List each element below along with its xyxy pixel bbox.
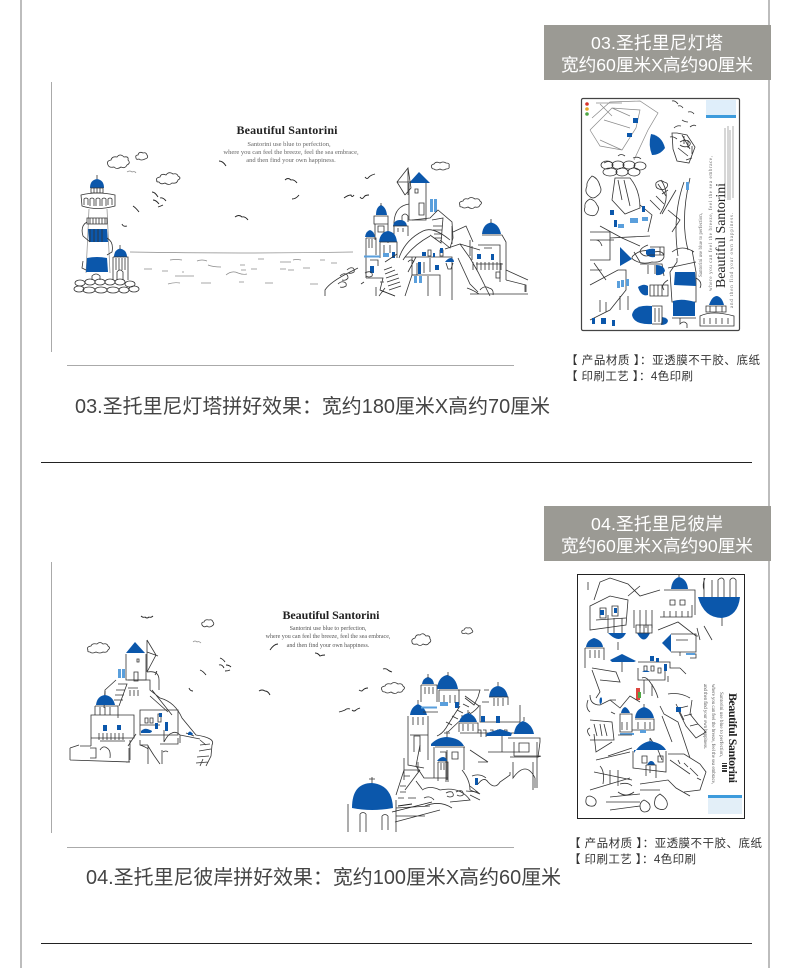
text: wall sticker slogan: Beautiful Santorini [236,123,338,137]
poster text: rotated title: Santorini use blue to perfection, [699,213,704,277]
text: wall sticker slogan: where you can feel the breeze, feel the sea embrace, [223,149,359,156]
heading: product 04 title box [544,506,771,561]
divider: panel 04 base line [67,846,514,848]
poster text: rotated title: Santorini use blue to perfection, [718,692,723,757]
text: wall sticker slogan: and then find your own happiness. [246,157,336,164]
heading: product 04 title box: 04.圣托里尼彼岸 [591,514,723,534]
illustration: sea lines [130,252,353,284]
poster text: rotated title: and then find your own happiness. [702,684,707,749]
text: wall sticker slogan: Santorini use blue to perfection, [247,141,331,148]
text: material specs 03: 【 产品材质 】：亚透膜不干胶、底纸 [566,353,760,367]
caption: 03 assembled size: 03.圣托里尼灯塔拼好效果：宽约180厘米X高约70厘米 [75,395,550,418]
heading: product 03 title box: 03.圣托里尼灯塔 [591,33,723,53]
text: wall sticker slogan: and then find your own happiness. [287,642,370,649]
text: material specs 03: 【 印刷工艺 】：4色印刷 [566,369,693,383]
illustration: clouds and birds [87,616,473,712]
text: wall sticker slogan [223,123,359,164]
illustration: right cliff village [348,672,541,832]
text: material specs 04: 【 印刷工艺 】：4色印刷 [569,852,696,866]
poster: lighthouse sticker sheet [582,98,740,330]
illustration: left cliff village [70,640,213,766]
text: material specs 03 [566,353,760,383]
poster text: rotated title: and then find your own happiness. [730,213,735,308]
text: material specs 04 [569,836,762,866]
illustration: cliff village with windmill [325,168,528,300]
poster text: rotated title: where you can feel the breeze, feel the sea embrace, [709,156,714,291]
divider: panel 03 base line [67,364,514,366]
text: wall sticker slogan: Beautiful Santorini [282,608,380,622]
text: wall sticker slogan [266,608,391,649]
illustration: clouds and birds [107,152,481,226]
poster text: rotated title: where you can feel the breeze, feel the sea embrace, [710,684,715,784]
caption: 04 assembled size: 04.圣托里尼彼岸拼好效果：宽约100厘米X高约60厘米 [86,866,561,889]
poster text: rotated title [699,156,735,308]
panel: product 03 [52,25,771,418]
poster text: rotated title [702,684,740,784]
panel: product 04 [52,506,771,889]
text: wall sticker slogan: Santorini use blue to perfection, [290,625,367,632]
illustration: lighthouse [74,175,139,293]
poster: santorini far shore sticker sheet [578,574,744,818]
poster text: rotated title: Beautiful Santorini [726,693,740,784]
text: material specs 04: 【 产品材质 】：亚透膜不干胶、底纸 [569,836,762,850]
text: wall sticker slogan: where you can feel the breeze, feel the sea embrace, [266,633,391,640]
heading: product 03 title box: 宽约60厘米X高约90厘米 [561,55,753,75]
poster text: rotated title: Beautiful Santorini [714,183,729,288]
heading: product 04 title box: 宽约60厘米X高约90厘米 [561,536,753,556]
heading: product 03 title box [544,25,771,80]
